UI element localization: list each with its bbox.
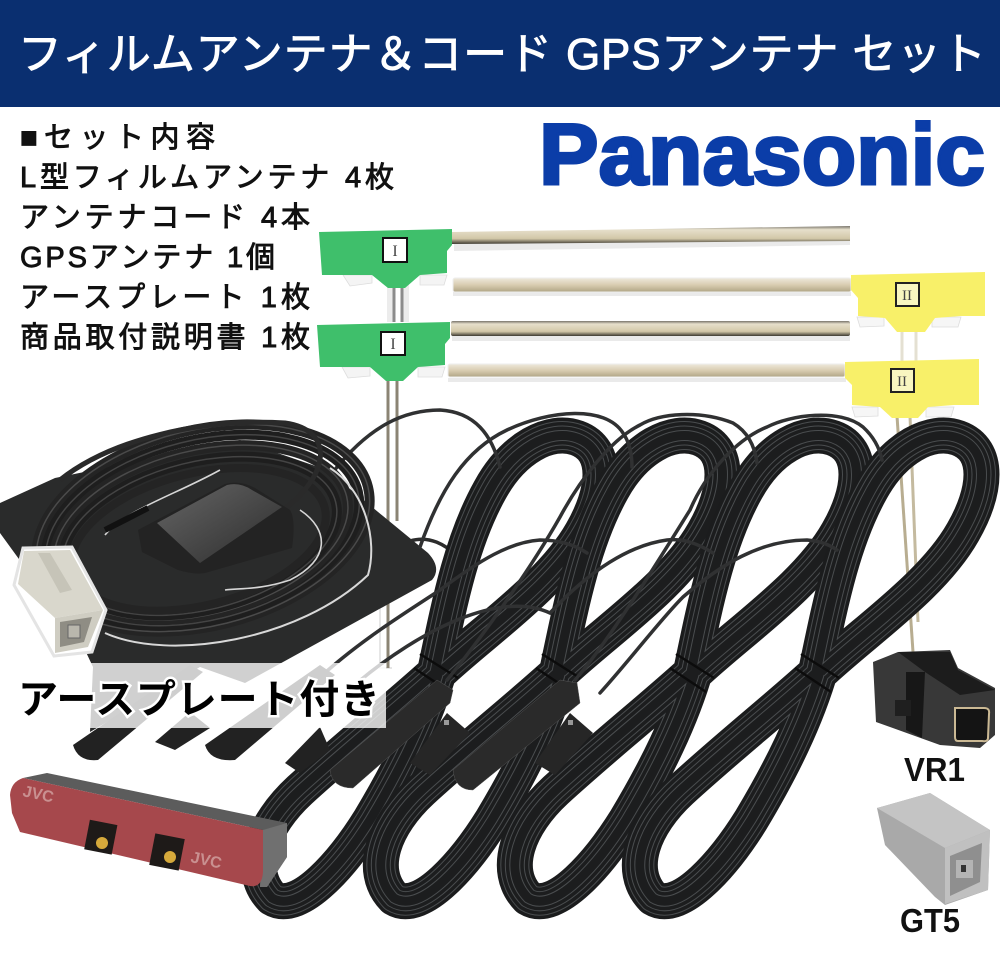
GT5 label: GT5 <box>900 902 960 939</box>
earth plate <box>0 440 436 732</box>
VR1 label: VR1 <box>904 751 965 788</box>
antenna leads <box>380 284 918 668</box>
adhesive amplifier pad <box>10 773 287 887</box>
antenna film II (yellow, lower) <box>448 359 979 418</box>
antenna film I (green, top): I <box>392 243 398 260</box>
antenna film II (yellow, top): II <box>902 288 912 304</box>
antenna film II (yellow, top) <box>453 272 985 332</box>
header banner <box>0 0 1000 107</box>
GPS antenna cable coil <box>14 392 392 664</box>
thin lead passing behind plate <box>410 539 458 556</box>
set contents list: L型フィルムアンテナ 4枚 <box>20 161 394 194</box>
antenna cord coil 2 <box>381 435 722 901</box>
GT5 connector on GPS cable <box>14 547 106 656</box>
set contents list: アンテナコード 4本 <box>20 201 310 234</box>
GT5 connector <box>877 793 990 905</box>
Panasonic logo: Panasonic <box>539 107 985 203</box>
GPS antenna puck <box>138 483 294 574</box>
title: フィルムアンテナ＆コード GPSアンテナ セット <box>18 30 986 79</box>
set contents list: 商品取付説明書 1枚 <box>20 321 310 354</box>
adhesive amplifier pad: JVC <box>189 849 224 872</box>
antenna cord coil 4 <box>640 435 982 901</box>
cord amplifier pods and connectors <box>73 665 593 790</box>
translucent caption band <box>0 663 386 728</box>
set contents list <box>20 121 394 354</box>
antenna film I (green, lower) <box>317 321 850 381</box>
antenna film I (green, lower): I <box>390 336 396 353</box>
set contents list: アースプレート 1枚 <box>20 281 310 314</box>
antenna cord coil 3 <box>515 435 856 901</box>
antenna film I (green, top) <box>319 226 850 288</box>
set contents list: ■セット内容 <box>20 121 215 154</box>
antenna cord coil 1 <box>259 435 600 901</box>
caption: earth plate included: アースプレート付き <box>18 678 380 722</box>
adhesive amplifier pad: JVC <box>21 783 56 806</box>
antenna cord thin leads <box>317 410 882 693</box>
VR1 connector <box>873 650 995 748</box>
antenna film II (yellow, lower): II <box>897 374 907 390</box>
set contents list: GPSアンテナ 1個 <box>20 242 275 274</box>
